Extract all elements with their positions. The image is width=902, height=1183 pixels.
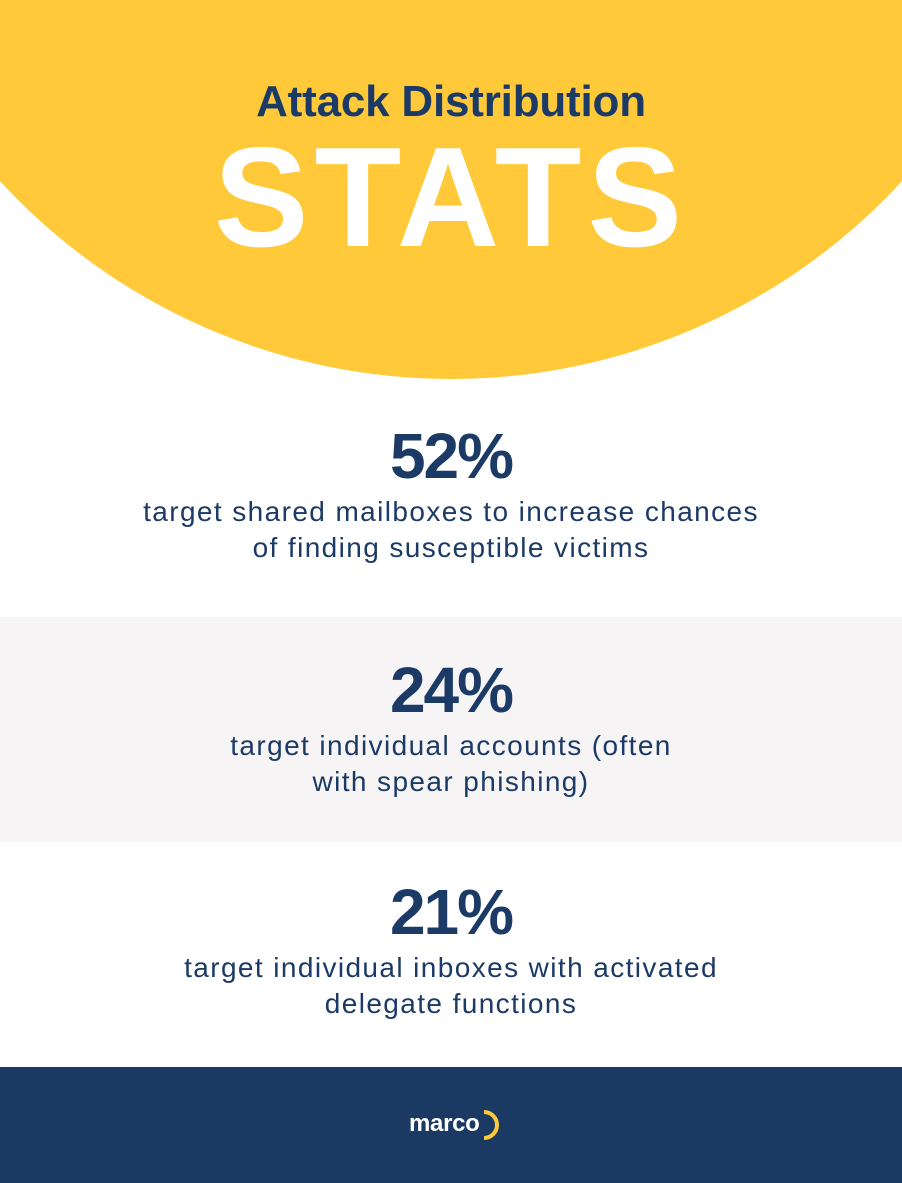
number 24%: 24% xyxy=(390,654,512,726)
heading: STATS: STATS xyxy=(214,118,688,277)
text xyxy=(143,496,759,563)
text: of finding susceptible victims xyxy=(253,532,649,563)
text: target individual inboxes with activated xyxy=(184,952,718,983)
title: Attack Distribution xyxy=(256,77,646,126)
stat block: 52% xyxy=(143,420,759,563)
text: target individual accounts (often xyxy=(230,730,672,761)
text xyxy=(184,952,718,1019)
stat block: 21% xyxy=(184,876,718,1019)
text xyxy=(230,730,672,797)
number 52%: 52% xyxy=(390,420,512,492)
text: with spear phishing) xyxy=(312,766,590,797)
logo: marco: marco xyxy=(409,1110,480,1137)
header: yellow circle xyxy=(0,0,902,379)
text: target shared mailboxes to increase chances xyxy=(143,496,759,527)
stat block: 24% xyxy=(230,654,672,797)
text: delegate functions xyxy=(325,988,577,1019)
number 21%: 21% xyxy=(390,876,512,948)
icon: yellow arc xyxy=(484,1110,499,1140)
footer xyxy=(0,1067,902,1183)
panel: gray band xyxy=(0,617,902,842)
